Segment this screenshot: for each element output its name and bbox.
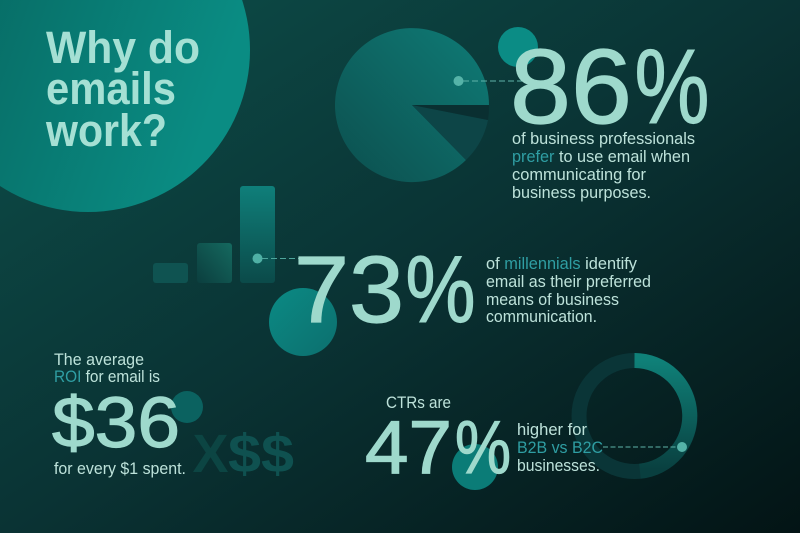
statistic: $36: [52, 384, 180, 463]
statistic: [365, 405, 511, 489]
multiplier graphic: [192, 424, 294, 484]
statistic: %: [455, 405, 511, 489]
bar chart: [153, 186, 275, 283]
statistic: [510, 28, 710, 146]
panel: ROI: [52, 351, 294, 484]
intro text: The average: [54, 351, 144, 369]
statistic: %: [634, 28, 710, 146]
panel: 86 percent: [335, 27, 710, 202]
panel: title circle: [0, 0, 250, 212]
description: [517, 421, 603, 475]
pie chart: [335, 28, 489, 182]
description: [512, 130, 695, 202]
description: higher for: [517, 421, 587, 439]
statistic: 86: [510, 28, 632, 146]
accent circle: [171, 391, 203, 423]
accent circle: [269, 288, 337, 356]
closing text: for every $1 spent.: [54, 460, 186, 478]
description: communication.: [486, 308, 597, 326]
description: B2B vs B2C: [517, 439, 603, 457]
panel: CTR: [365, 360, 690, 490]
intro text: ROI for email is: [54, 368, 160, 386]
multiplier graphic: $$: [228, 424, 294, 484]
intro text: CTRs are: [386, 394, 451, 412]
accent circle: [498, 27, 538, 67]
panel: 73 percent: [153, 186, 651, 356]
hero circle: [0, 0, 250, 212]
description: [486, 255, 651, 326]
description: means of business: [486, 291, 619, 309]
description: businesses.: [517, 457, 600, 475]
intro text: [54, 351, 160, 386]
title: work?: [45, 105, 167, 156]
donut chart: [579, 360, 690, 472]
title: [45, 22, 200, 156]
accent circle: [452, 444, 498, 490]
connector dot and dashed line: [454, 76, 524, 86]
description: of business professionals: [512, 130, 695, 148]
statistic: %: [406, 237, 476, 343]
statistic: 47: [365, 405, 452, 489]
description: of millennials identify: [486, 255, 638, 273]
title: emails: [46, 63, 176, 114]
description: communicating for: [512, 166, 646, 184]
description: business purposes.: [512, 184, 651, 202]
description: email as their preferred: [486, 273, 651, 291]
statistic: [294, 237, 476, 343]
statistic: 73: [294, 237, 404, 343]
multiplier graphic: X: [192, 424, 228, 484]
title: Why do: [46, 22, 200, 73]
connector dot and dashed line: [252, 254, 300, 264]
description: prefer to use email when: [512, 148, 690, 166]
connector dot and dashed line: [603, 442, 687, 452]
